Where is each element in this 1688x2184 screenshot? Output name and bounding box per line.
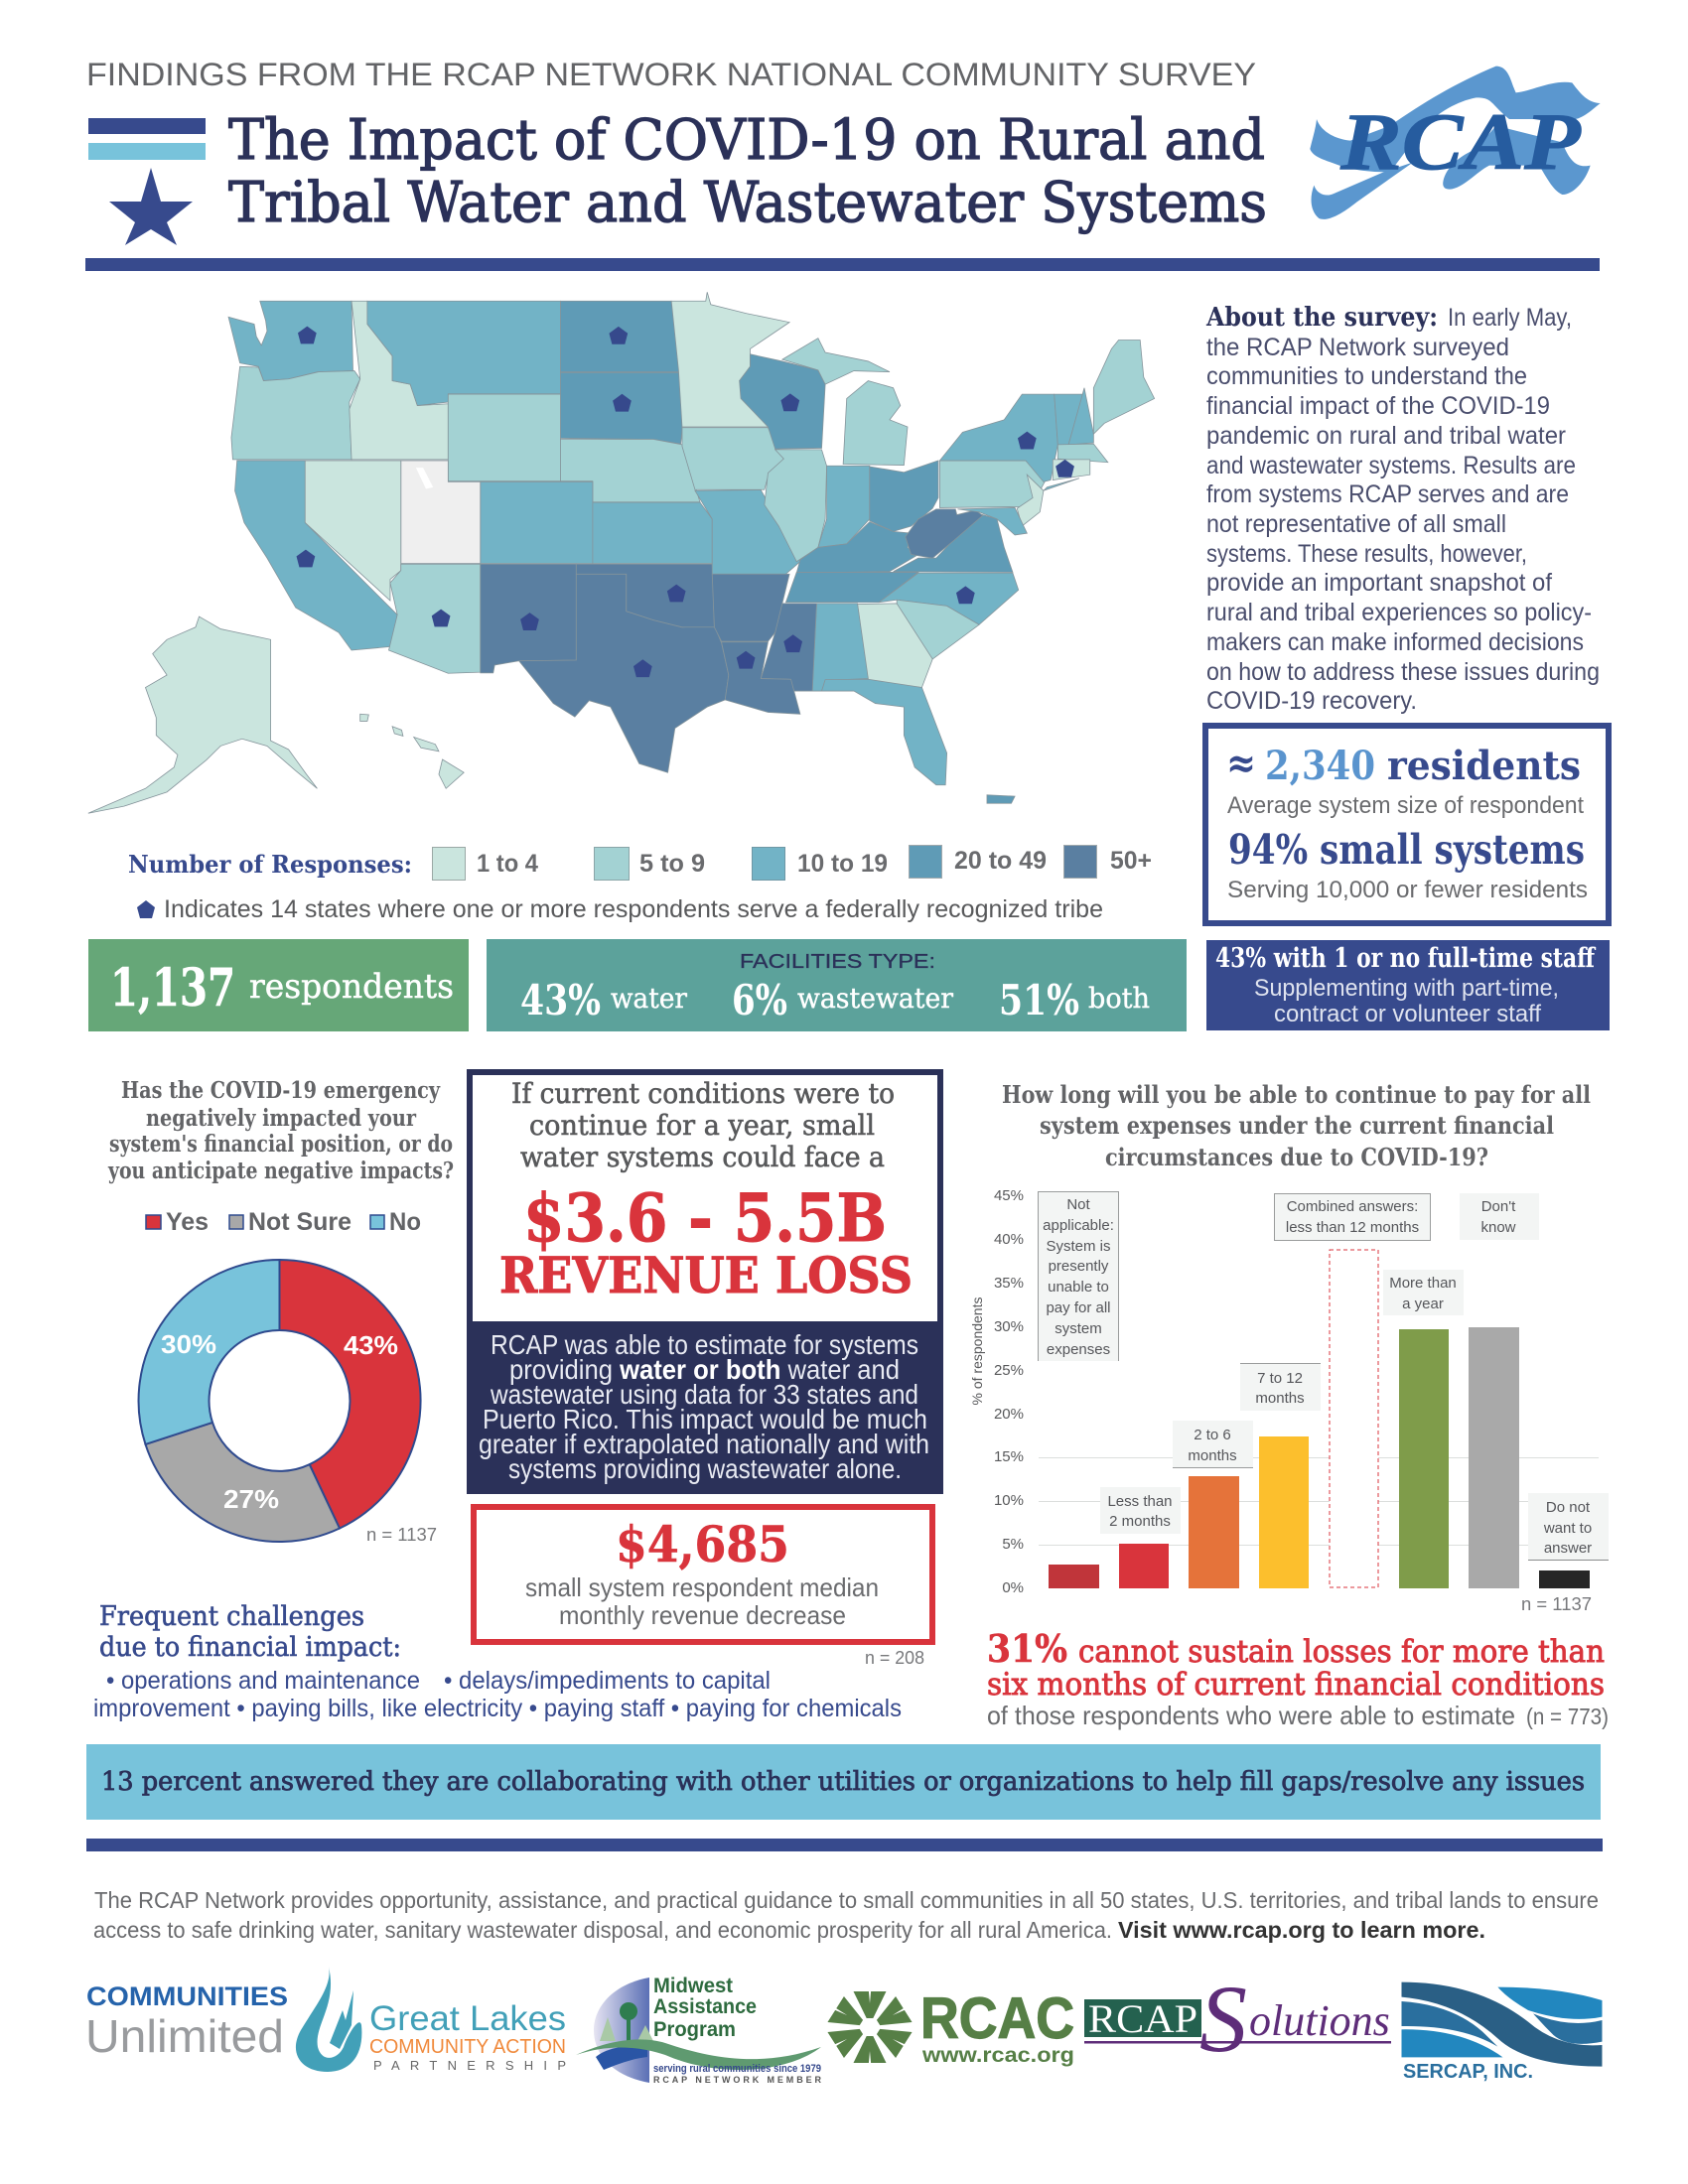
label: less than 2 months [1100,1487,1181,1534]
about the survey: makers can make informed decisions [1206,628,1584,656]
frequent challenges heading [99,1601,401,1663]
label: not applicable: presently [1049,1258,1109,1275]
donut legend [146,1208,421,1236]
about the survey: not representative of all small [1206,510,1506,538]
label: do not want to answer: answer [1544,1540,1592,1557]
bar chart [969,1187,1609,1614]
legend: number of responses: 50+ [1110,847,1152,875]
about RCAP text [93,1887,1599,1943]
donut chart: 27% [223,1484,279,1514]
bar chart question [1002,1080,1591,1171]
bar chart question: circumstances due to COVID-19? [1105,1143,1488,1171]
panel: facilities type: 43% [520,976,601,1024]
label: don't know: Don't [1481,1198,1516,1215]
callout: 31 percent: of those respondents who were able to estimate [987,1701,1515,1730]
banner: collaboration: 13 percent answered they are collaborating with other utilities or organizations to help fill gaps/resolve any issues [101,1767,1585,1797]
panel: staffing: 43% with 1 or no full-time staff [1215,943,1596,974]
logo: Midwest Assistance Program: Assistance [653,1995,757,2018]
logo: RCAC [827,1986,1074,2067]
panel: facilities type: FACILITIES TYPE: [740,951,935,973]
title [228,108,1267,235]
label: more than a year: a year [1402,1296,1444,1312]
y axis labels: 25% [994,1362,1024,1379]
eyebrow heading: FINDINGS FROM THE RCAP NETWORK NATIONAL COMMUNITY SURVEY [86,57,1256,92]
y axis labels: 20% [994,1406,1024,1423]
about RCAP text: Visit www.rcap.org to learn more. [1118,1917,1485,1943]
panel: revenue loss: continue for a year, small [529,1109,875,1142]
donut chart: 43% [344,1330,398,1360]
panel: staffing [1206,940,1610,1030]
about the survey: provide an important snapshot of [1206,569,1552,597]
about the survey: rural and tribal experiences so policy- [1206,599,1592,626]
label: not applicable: expenses [1047,1341,1110,1358]
panel: estimate explanation: providing water or both water and [509,1354,900,1385]
label: do not want to answer: Do not [1546,1499,1591,1516]
label: don't know [1460,1193,1539,1240]
label: 2 to 6 months: months [1188,1447,1237,1464]
donut question: you anticipate negative impacts? [107,1158,454,1184]
label: 7 to 12 months: months [1255,1390,1305,1407]
y axis title: % of respondents [969,1297,985,1405]
label: combined answers: less than 12 months [1286,1219,1419,1236]
bars [1049,1250,1590,1588]
logo: Communities Unlimited: COMMUNITIES [86,1981,288,2011]
panel: estimate explanation: wastewater using data for 33 states and [490,1379,918,1410]
callout: 31 percent [987,1626,1609,1730]
label: combined answers: Combined answers: [1287,1198,1418,1215]
logo: Communities Unlimited [85,1967,361,2072]
callout: 31 percent: cannot sustain losses for more than [1078,1634,1605,1670]
frequent challenges list: improvement • paying bills, like electricity • paying staff • paying for chemicals [93,1695,902,1722]
panel: system size stats: Serving 10,000 or fewer residents [1227,877,1588,903]
label: not applicable: System is [1046,1238,1111,1255]
label: less than 2 months: 2 months [1109,1513,1171,1530]
label: do not want to answer [1528,1493,1609,1561]
logo: Great Lakes Community Action Partnership: Great Lakes [369,1999,566,2038]
donut chart: 30% [161,1329,216,1359]
panel: median revenue decrease: monthly revenue decrease [559,1600,846,1630]
label: do not want to answer: want to [1543,1520,1592,1537]
donut question: system's financial position, or do [109,1131,453,1158]
about the survey: the RCAP Network surveyed [1206,334,1509,361]
about the survey: communities to understand the [1206,362,1527,390]
y axis labels: 5% [1002,1536,1024,1553]
callout: 31 percent: 31% [987,1626,1067,1671]
frequent challenges list: • delays/impediments to capital [444,1667,771,1695]
logo: RCAP Solutions: olutions [1249,1996,1390,2045]
label: not applicable: applicable: [1043,1217,1114,1234]
donut sample size: n = 1137 [366,1525,437,1545]
legend: number of responses: 10 to 19 [797,850,888,878]
panel: system size stats: residents [1387,743,1581,789]
panel: staffing: Supplementing with part-time, [1254,975,1559,1002]
donut legend: No [389,1208,421,1236]
panel: revenue loss [470,1072,940,1324]
label: not applicable: pay for all [1046,1299,1111,1316]
panel: system size stats: Average system size of respondent [1227,792,1584,819]
donut question [107,1077,454,1184]
donut question: Has the COVID-19 emergency [121,1077,441,1104]
legend note: tribal marker: Indicates 14 states where one or more respondents serve a federally recognized tribe [164,895,1103,923]
legend: number of responses: Number of Responses: [128,850,412,879]
bar chart question: system expenses under the current financial [1040,1111,1554,1140]
panel: revenue loss: REVENUE LOSS [499,1246,913,1304]
bar chart question: How long will you be able to continue to pay for all [1002,1080,1591,1109]
y axis labels: 35% [994,1275,1024,1292]
label: don't know: know [1480,1219,1516,1236]
panel: respondents: respondents [249,967,454,1007]
banner: collaboration [86,1744,1601,1820]
about the survey: from systems RCAP serves and are [1206,480,1569,508]
panel: system size stats: 2,340 [1265,743,1375,789]
label: 7 to 12 months: 7 to 12 [1257,1370,1303,1387]
callout: 31 percent: six months of current financial conditions [987,1667,1605,1703]
label: not applicable: unable to [1048,1279,1109,1296]
logo: RCAC: www.rcac.org [921,2044,1074,2067]
about the survey [1205,303,1600,715]
frequent challenges heading: Frequent challenges [99,1601,364,1632]
donut question: negatively impacted your [146,1105,417,1132]
bar chart sample size: n = 1137 [1521,1594,1592,1614]
logo: RCAP [1310,67,1601,219]
logo: RCAC: RCAC [920,1986,1074,2051]
frequent challenges list: • operations and maintenance [106,1667,420,1695]
logo: RCAP Solutions [1084,1966,1391,2072]
panel: facilities type [487,939,1187,1031]
label: more than a year [1383,1270,1464,1315]
panel: facilities type: 51% [999,976,1079,1024]
label: not applicable: Not [1066,1196,1091,1213]
icon: flag stripes and star [88,118,206,245]
logo: RCAP: RCAP [1339,96,1582,187]
y axis labels: 45% [994,1187,1024,1204]
label: more than a year: More than [1389,1275,1457,1292]
about the survey: About the survey: [1205,303,1438,333]
logo: RCAP Solutions: S [1199,1966,1247,2072]
panel: system size stats [1205,726,1609,923]
panel: revenue loss: $3.6 - 5.5B [523,1179,887,1257]
panel: facilities type: water [611,982,688,1015]
panel: estimate explanation: RCAP was able to estimate for systems [491,1329,918,1360]
panel: facilities type: wastewater [797,982,954,1015]
frequent challenges heading: due to financial impact: [99,1632,401,1663]
y axis labels [994,1187,1024,1596]
panel: revenue loss: If current conditions were to [511,1077,895,1110]
logo: Midwest Assistance Program: Program [653,2018,736,2041]
legend: number of responses: 1 to 4 [477,850,538,878]
legend: number of responses: 20 to 49 [954,847,1047,875]
label: less than 2 months: Less than [1107,1493,1173,1510]
logo: Great Lakes Community Action Partnership [369,1999,566,2073]
median sample size: n = 208 [865,1648,924,1668]
about the survey: and wastewater systems. Results are [1206,452,1576,479]
footer rule [86,1839,1603,1851]
callout: 31 percent: (n = 773) [1526,1704,1609,1729]
panel: staffing: contract or volunteer staff [1274,1001,1541,1027]
panel: facilities type: 6% [732,976,787,1024]
logo: SERCAP: SERCAP, INC. [1403,2061,1533,2083]
label: combined answers [1275,1193,1430,1241]
logo: SERCAP [1402,1982,1602,2083]
about the survey: financial impact of the COVID-19 [1206,392,1550,420]
logo: Communities Unlimited: Unlimited [85,2010,284,2062]
panel: median revenue decrease: $4,685 [616,1515,789,1573]
about the survey: COVID-19 recovery. [1206,687,1417,715]
about RCAP text: access to safe drinking water, sanitary wastewater disposal, and economic prosperity for all rural America. [93,1917,1112,1943]
donut legend: Not Sure [248,1208,352,1236]
panel: system size stats: 94% small systems [1228,826,1585,874]
label: 2 to 6 months [1173,1421,1253,1468]
panel: estimate explanation [467,1324,943,1494]
frequent challenges list [93,1667,902,1722]
logo: Midwest Assistance Program [576,1975,822,2085]
legend: number of responses [128,846,1152,880]
y axis labels: 30% [994,1318,1024,1335]
label: 7 to 12 months [1240,1363,1321,1411]
panel: system size stats: ≈ [1226,739,1256,787]
label: not applicable: system [1055,1320,1102,1337]
panel: estimate explanation: systems providing wastewater alone. [508,1453,902,1484]
panel: respondents: 1,137 [110,958,235,1019]
y axis labels: 15% [994,1448,1024,1465]
label: not applicable [1038,1191,1119,1361]
about RCAP text: The RCAP Network provides opportunity, assistance, and practical guidance to small communities in all 50 states, U.S. territories, and tribal lands to ensure [94,1887,1599,1913]
map: responses by state [87,292,1156,814]
logo: Great Lakes Community Action Partnership: PARTNERSHIP [373,2058,566,2073]
panel: median revenue decrease [474,1507,932,1642]
panel: revenue loss: water systems could face a [520,1141,885,1173]
title: The Impact of COVID-19 on Rural and [228,108,1265,173]
panel: respondents [88,939,469,1031]
logo: Midwest Assistance Program: serving rural communities since 1979 [653,2063,821,2075]
y axis labels: 0% [1002,1579,1024,1596]
about the survey: on how to address these issues during [1206,658,1600,686]
panel: estimate explanation: greater if extrapolated nationally and with [479,1429,929,1459]
logo: Midwest Assistance Program: Midwest [653,1975,733,1997]
y axis labels: 40% [994,1231,1024,1248]
logo: RCAP Solutions: RCAP [1088,1996,1197,2041]
y axis labels: 10% [994,1492,1024,1509]
header rule [85,258,1600,271]
panel: facilities type: both [1088,982,1150,1015]
about the survey: In early May, [1448,304,1572,332]
logo: Great Lakes Community Action Partnership: COMMUNITY ACTION [369,2036,566,2058]
donut legend: Yes [166,1208,209,1236]
label: 2 to 6 months: 2 to 6 [1194,1427,1231,1443]
about the survey: systems. These results, however, [1206,540,1527,568]
title: Tribal Water and Wastewater Systems [228,171,1267,235]
about the survey: pandemic on rural and tribal water [1206,422,1566,450]
legend: number of responses: 5 to 9 [639,850,705,878]
panel: median revenue decrease: small system respondent median [525,1572,879,1602]
donut chart [139,1260,421,1542]
logo: Midwest Assistance Program: RCAP NETWORK MEMBER [653,2075,822,2085]
panel: estimate explanation: Puerto Rico. This impact would be much [483,1404,927,1434]
